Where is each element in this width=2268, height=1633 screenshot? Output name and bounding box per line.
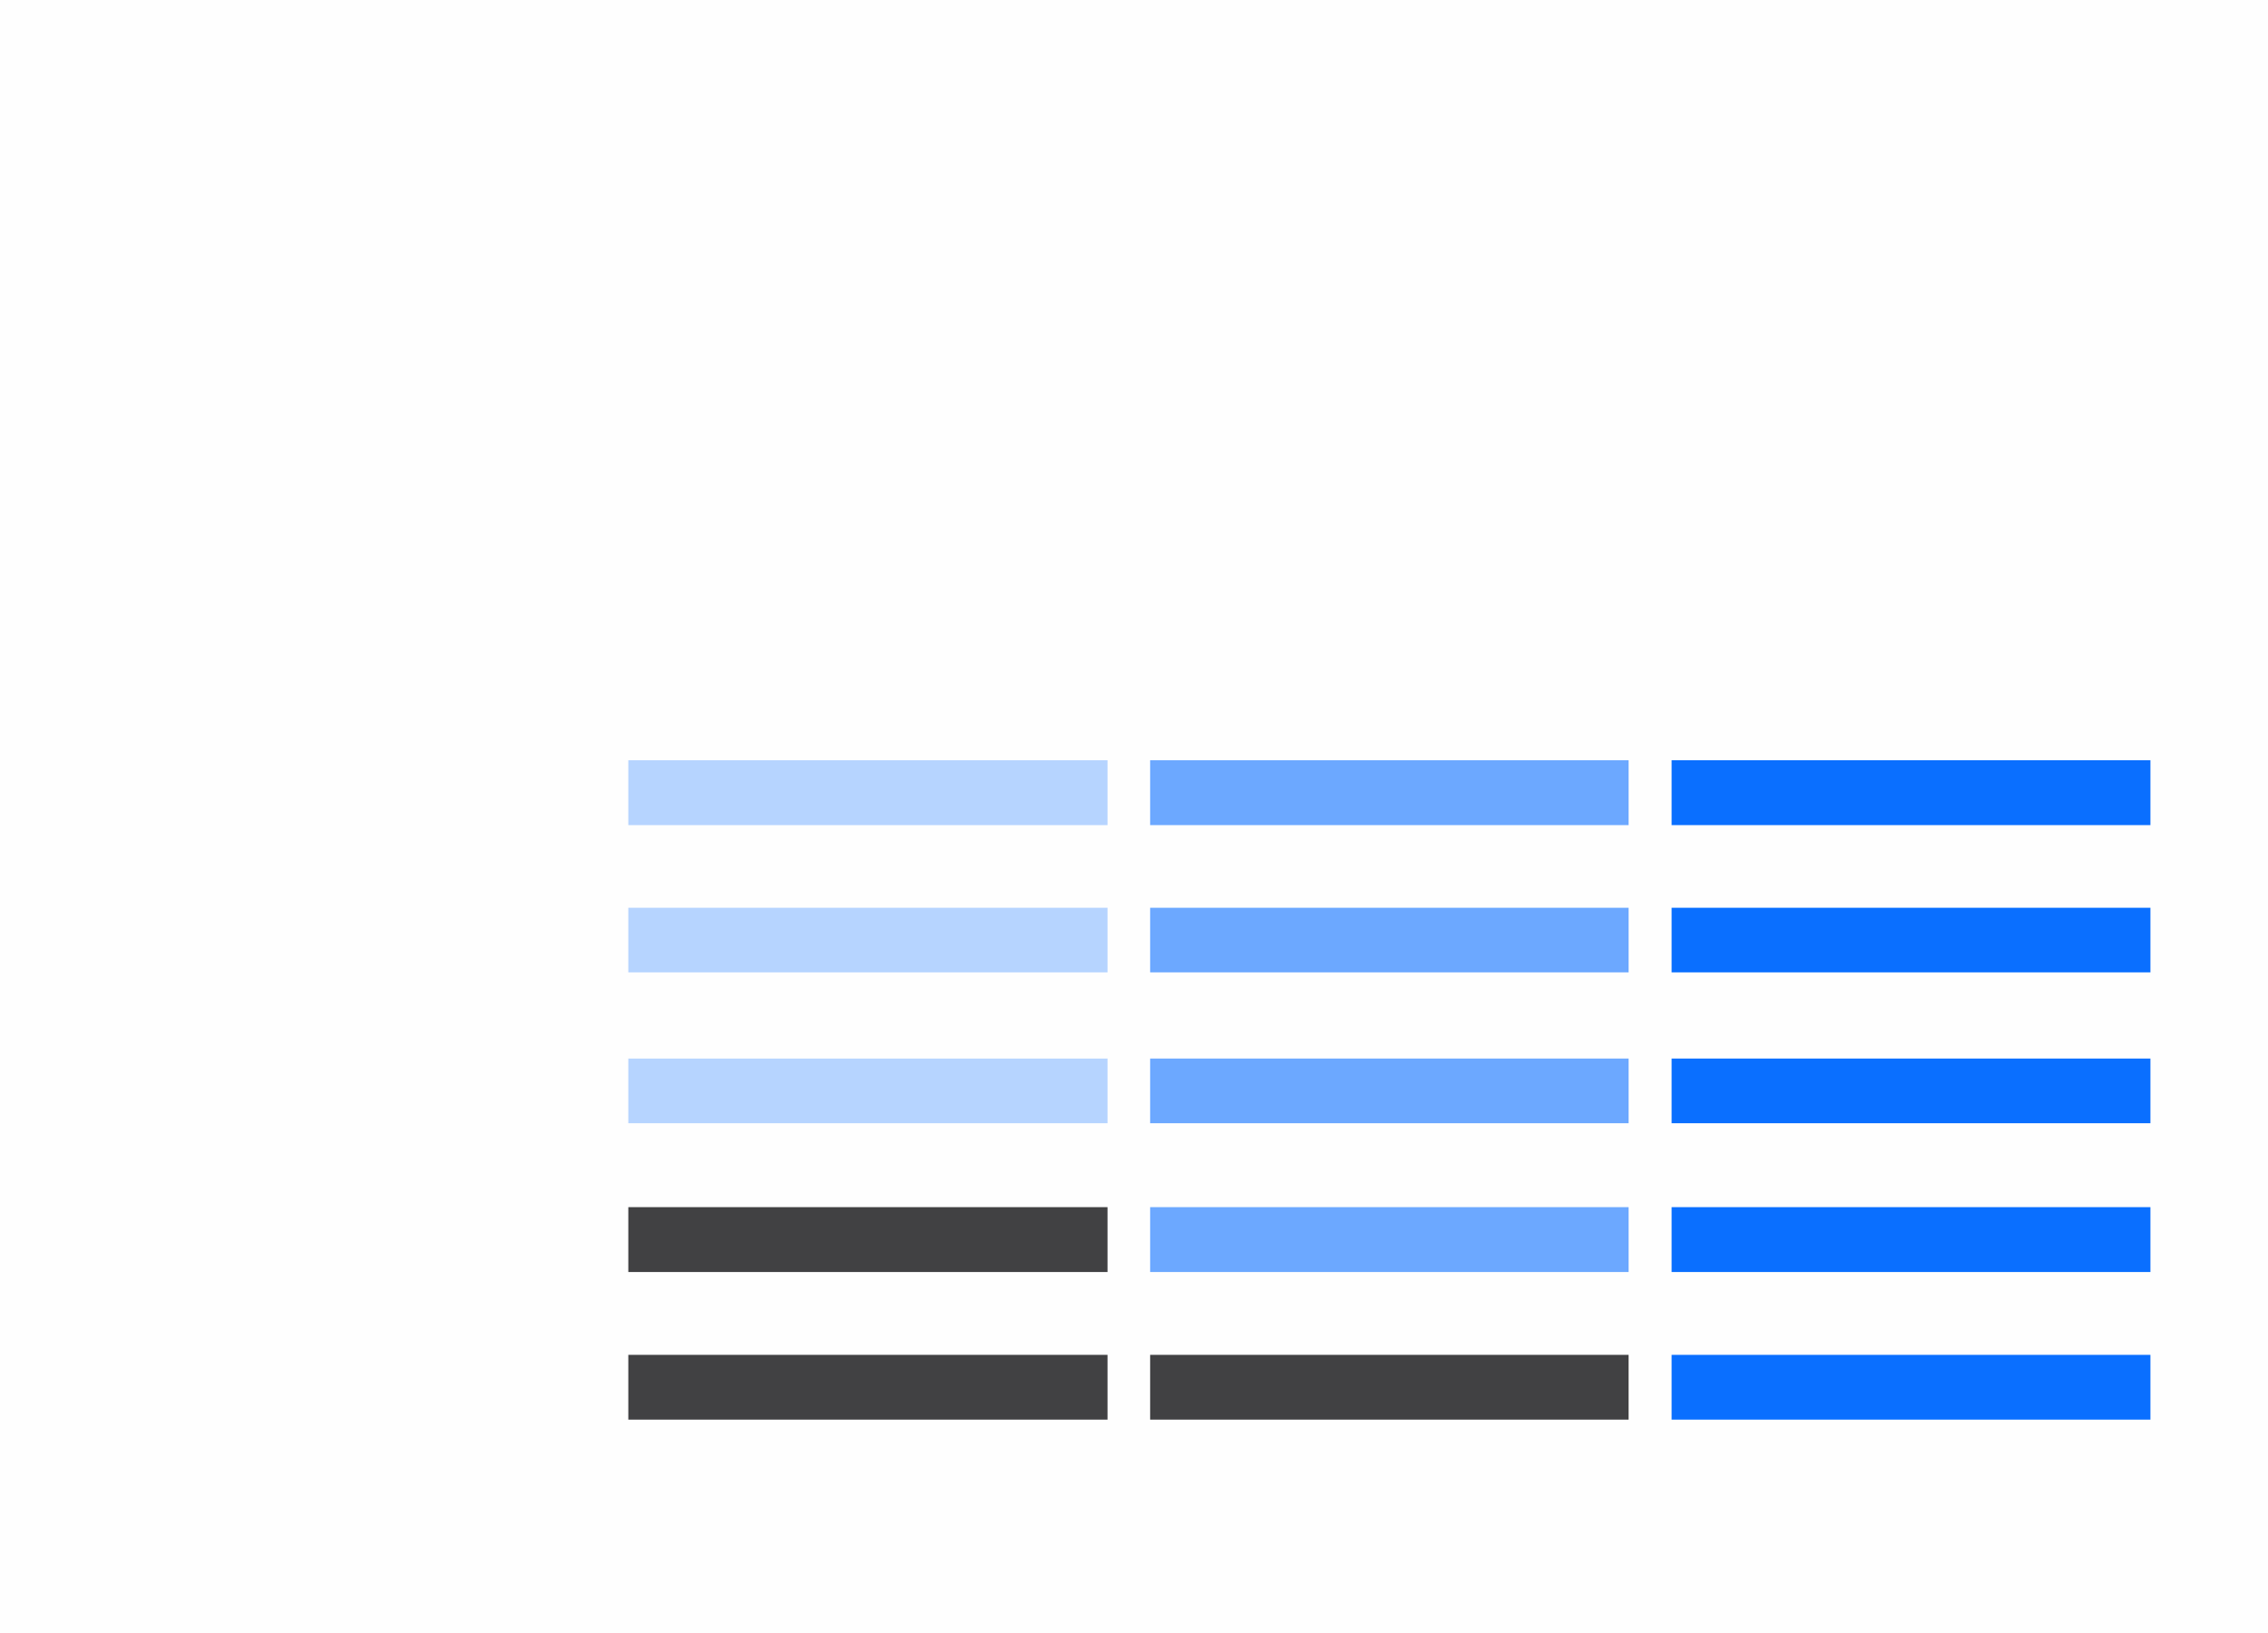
row 3 blocks xyxy=(629,1059,2150,1123)
row 1 blocks xyxy=(629,760,2150,826)
row 5 blocks xyxy=(629,1354,2150,1420)
row 2 blocks xyxy=(629,908,2150,973)
row 4 blocks xyxy=(629,1208,2150,1272)
